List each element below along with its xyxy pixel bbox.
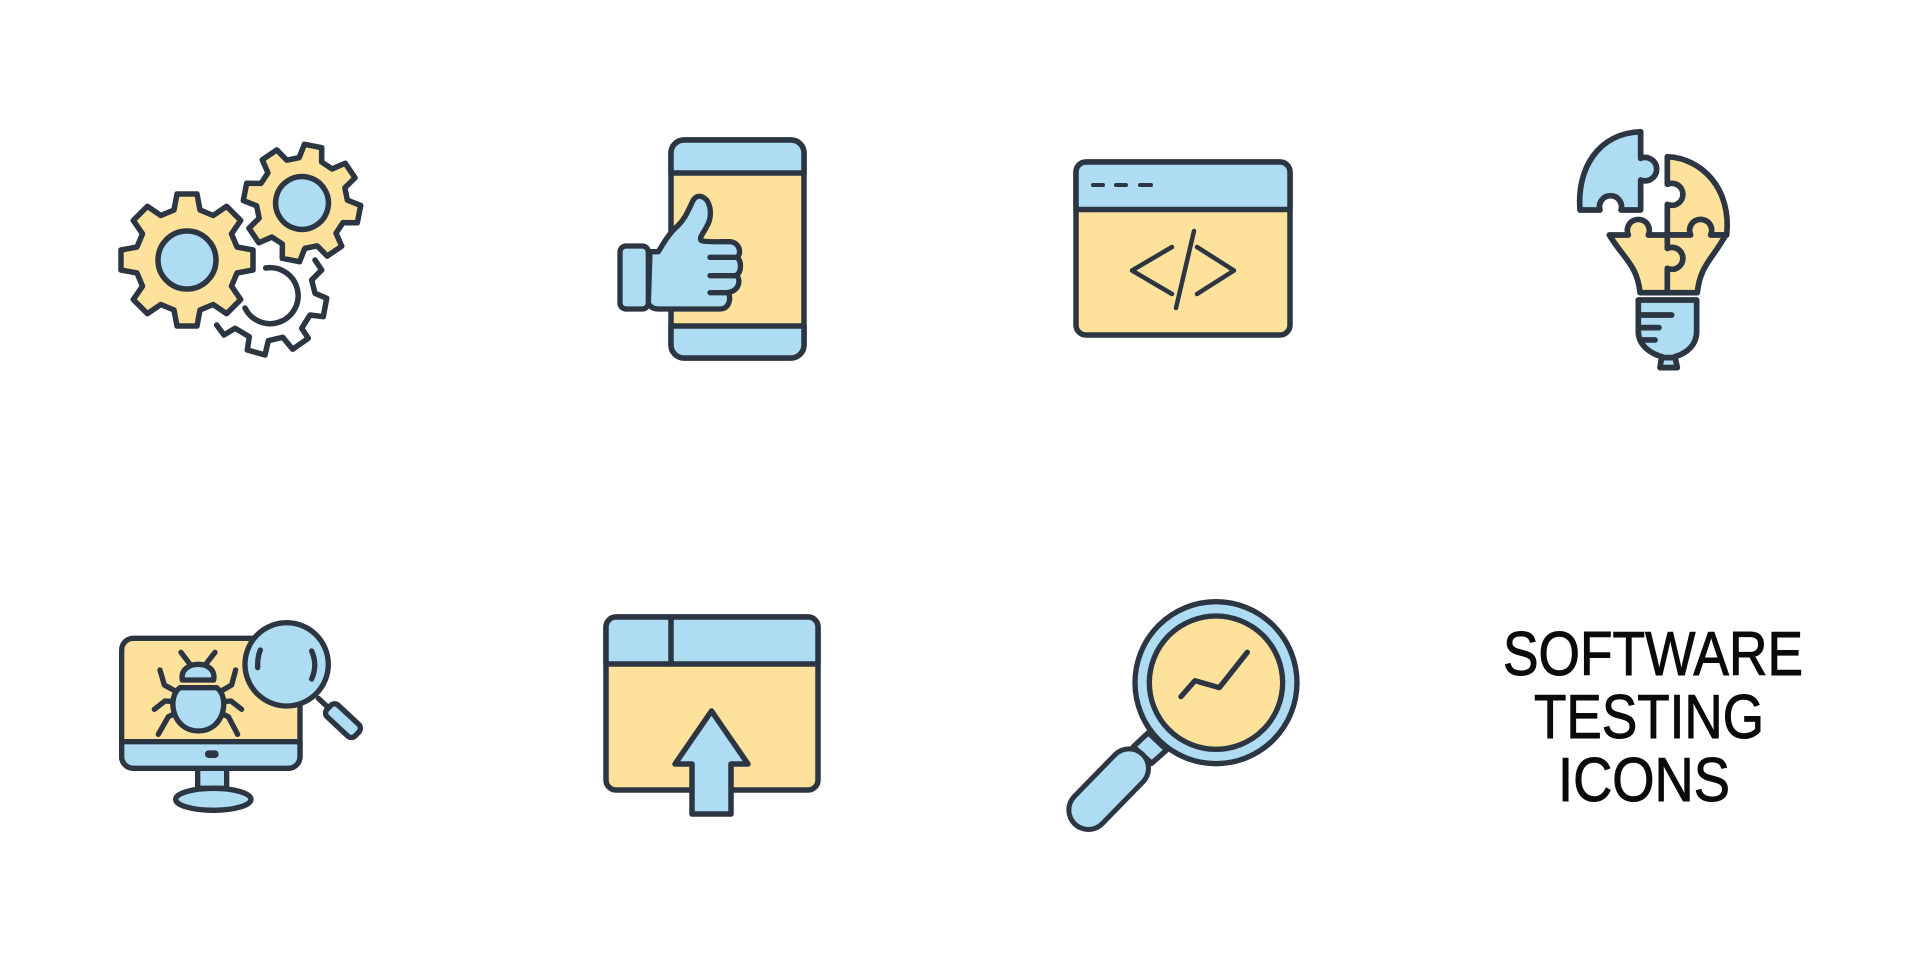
icon: bug on monitor with magnifier <box>122 623 363 810</box>
title text <box>1503 620 1803 815</box>
window frame <box>606 617 818 790</box>
monitor <box>122 638 300 768</box>
magnifier neck <box>1133 733 1167 763</box>
thumbs up hand <box>620 196 740 309</box>
icon: upload window <box>606 617 818 814</box>
icon: magnifier with chart <box>1088 602 1297 810</box>
open outline gear <box>217 260 327 355</box>
magnifier <box>245 623 363 740</box>
monitor stand <box>176 768 251 810</box>
icon: puzzle light bulb <box>1580 132 1727 368</box>
bulb base <box>1638 300 1697 368</box>
bug <box>154 652 242 734</box>
icon: code window <box>1076 162 1290 335</box>
lens <box>1135 602 1297 764</box>
icon: gears <box>121 135 370 355</box>
chart line <box>1181 652 1247 697</box>
title text: TESTING <box>1534 683 1764 752</box>
phone body <box>671 140 804 358</box>
small gear <box>234 135 370 271</box>
code symbol <box>1132 231 1234 308</box>
magnifier handle <box>1088 768 1129 810</box>
icon: phone with thumbs up <box>620 140 804 358</box>
window frame <box>1076 162 1290 335</box>
large gear <box>121 194 253 326</box>
upper right puzzle piece <box>1667 157 1727 235</box>
title text: SOFTWARE <box>1503 620 1803 689</box>
lower left puzzle piece <box>1609 219 1683 293</box>
upload arrow <box>675 711 748 814</box>
title text: ICONS <box>1558 746 1730 815</box>
lower right puzzle piece <box>1667 219 1726 293</box>
blue puzzle piece <box>1580 132 1657 210</box>
